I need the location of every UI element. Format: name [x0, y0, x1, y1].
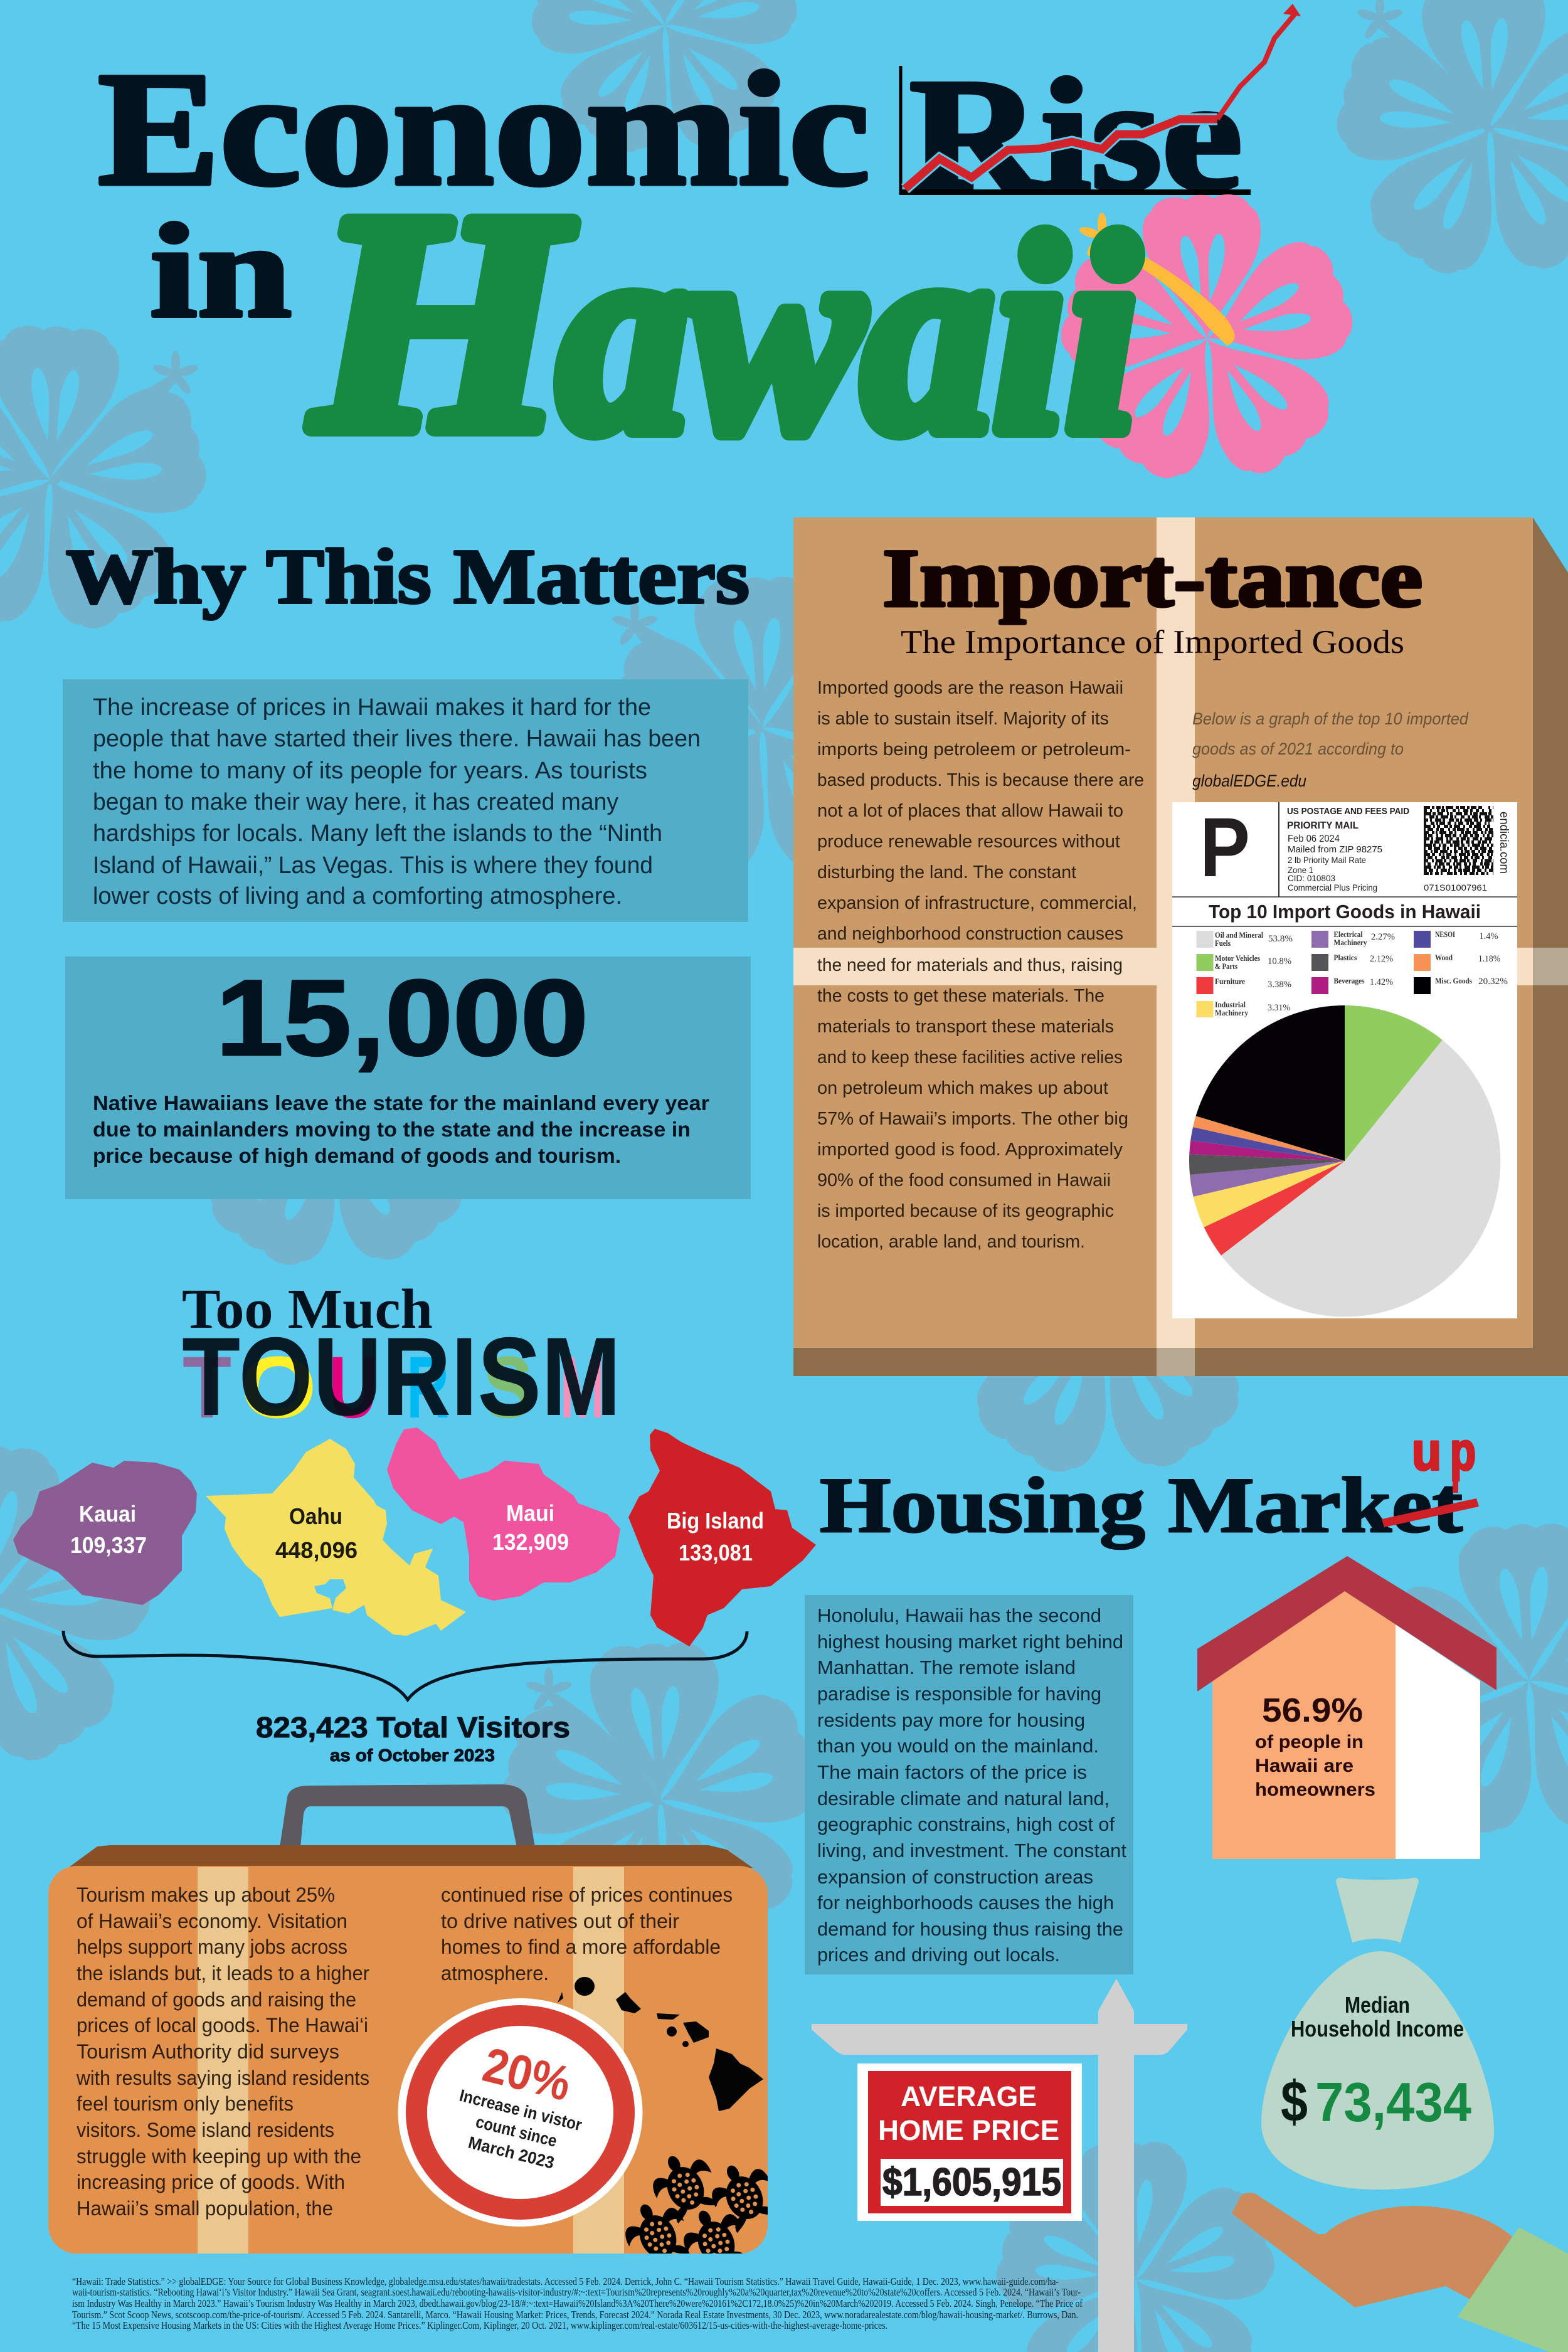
text block: imported goods: materials to transport these materials — [817, 1017, 1114, 1037]
icon: for sale style sign: AVERAGE — [901, 2080, 1037, 2112]
panel: why this matters text — [63, 679, 748, 922]
text: tourism column one — [76, 1883, 369, 2220]
heading: Too Much: Too Much — [182, 1278, 433, 1340]
legend: 20.32% — [1478, 977, 1508, 987]
citations: ism Industry Was Healthy in March 2023.” Hawaii’s Tourism Industry Was Healthy in March 2023, dbedt.hawaii.gov/blog/23-18/#:~:text=Hawaii%20Island%3A%20There%20were%20161%2C172,18.0%25)%20in%20March%202019. Accessed 5 Feb. 2024. Singh, Penelope. “The Price of — [72, 2297, 1083, 2309]
legend: 2.12% — [1370, 954, 1393, 964]
icon: house homeowners: of people in — [1255, 1732, 1364, 1752]
legend: Oil and Mineral — [1215, 931, 1263, 940]
heading: Import-tance: The Importance of Imported Goods — [901, 624, 1404, 660]
heading: TOURISM: R — [406, 1338, 449, 1436]
panel: housing text: The main factors of the price is — [817, 1761, 1087, 1783]
icon: for sale style sign: $1,605,915 — [882, 2161, 1061, 2204]
panel: housing text: for neighborhoods causes the high — [817, 1892, 1114, 1914]
panel: shipping label chart — [1172, 801, 1517, 1318]
text block: imported goods: not a lot of places that allow Hawaii to — [817, 801, 1123, 821]
island: Big Island: Big Island — [667, 1508, 764, 1534]
legend: Misc. Goods — [1435, 977, 1472, 985]
text block: imported goods: produce renewable resources without — [817, 832, 1120, 852]
text block: imported goods: the costs to get these materials. The — [817, 986, 1104, 1006]
panel: why this matters text: the home to many of its people for years. As tourists — [93, 758, 647, 784]
stamp: 20 percent increase: Increase in vistor — [458, 2086, 584, 2134]
legend: Fuels — [1215, 939, 1231, 948]
panel: 15,000 stat: 15,000 — [216, 958, 588, 1078]
panel: housing text — [805, 1595, 1133, 1974]
panel: housing text: Manhattan. The remote island — [817, 1656, 1076, 1678]
text: tourism column one: Hawaii’s small population, the — [77, 2197, 333, 2220]
icon: for sale style sign — [812, 1979, 1187, 2352]
text: tourism column one: demand of goods and raising the — [77, 1988, 356, 2011]
heading: TOURISM: S — [483, 1338, 533, 1436]
text block: imported goods: and neighborhood construction causes — [817, 924, 1123, 944]
label: postage header: Zone 1 — [1288, 865, 1313, 875]
panel: 15,000 stat: price because of high demand of goods and tourism. — [93, 1144, 621, 1167]
stamp: 20 percent increase: March 2023 — [467, 2133, 556, 2173]
icon: house homeowners: Hawaii are — [1255, 1756, 1353, 1776]
title: Economic Rise: Economic — [98, 39, 870, 220]
heading: TOURISM: U — [329, 1338, 378, 1436]
text: tourism column one: Tourism Authority did surveys — [77, 2040, 339, 2063]
legend: Beverages — [1333, 977, 1365, 985]
text: tourism column two: to drive natives out of their — [441, 1910, 679, 1932]
panel: 15,000 stat: Native Hawaiians leave the state for the mainland every year — [93, 1091, 709, 1115]
heading: Housing Market — [820, 1422, 1479, 1549]
text block: imported goods: imported good is food. Approximately — [817, 1140, 1123, 1160]
panel: why this matters text: began to make their way here, it has created many — [93, 789, 618, 815]
legend: Furniture — [1215, 977, 1245, 986]
title: in: in — [150, 196, 292, 346]
panel: housing text: demand for housing thus raising the — [817, 1918, 1123, 1940]
panel: housing text: geographic constrains, high cost of — [817, 1813, 1115, 1835]
icon: money bag median income: Household Income — [1291, 2016, 1464, 2042]
panel: why this matters text: people that have started their lives there. Hawaii has been — [93, 726, 701, 752]
label: postage header: endicia.com — [1497, 812, 1510, 874]
heading: Housing Market: u — [1412, 1422, 1441, 1481]
text block: imported goods: is imported because of its geographic — [817, 1201, 1114, 1221]
text block: imported goods: and to keep these facilities active relies — [817, 1047, 1123, 1067]
legend: NESOI — [1435, 930, 1455, 939]
panel: housing text: than you would on the mainland. — [817, 1735, 1099, 1757]
text block: imported goods: 90% of the food consumed in Hawaii — [817, 1170, 1111, 1190]
legend: Plastics — [1333, 953, 1357, 962]
island: Maui — [387, 1428, 620, 1601]
note: graph introduction: Below is a graph of the top 10 imported — [1192, 709, 1469, 728]
panel: why this matters text: Island of Hawaii,” Las Vegas. This is where they found — [93, 852, 653, 879]
icon: sea turtles — [625, 2156, 768, 2254]
total visitors: 823,423 Total Visitors — [256, 1711, 570, 1744]
label: postage header: CID: 010803 — [1288, 873, 1335, 883]
chart title: Top 10 Import Goods in Hawaii — [1209, 901, 1481, 923]
text block: imported goods: imports being petroleem or petroleum- — [817, 739, 1131, 760]
panel: housing text: highest housing market right behind — [817, 1631, 1123, 1653]
panel: suitcase — [48, 1784, 784, 2282]
label: postage header: 2 lb Priority Mail Rate — [1288, 855, 1366, 865]
island: Kauai — [13, 1461, 197, 1605]
legend: 3.31% — [1268, 1003, 1290, 1013]
citations: waii-tourism-statistics. “Rebooting Hawai‘i’s Visitor Industry.” Hawaii Sea Grant, seagrant.soest.hawaii.edu/rebooting-hawaiis-visitor-industry/#:~:text=Tourism%20represents%20roughly%20a%20quarter,tax%20revenue%20to%20state%20coffers. Accessed 5 Feb. 2024. “Hawaii’s Tour- — [72, 2286, 1081, 2298]
icon: money bag median income — [1261, 1878, 1494, 2190]
legend: 2.27% — [1371, 932, 1395, 942]
suitcase handle — [280, 1784, 535, 1847]
icon: house homeowners: homeowners — [1255, 1779, 1375, 1800]
text: tourism column one: with results saying island residents — [76, 2067, 369, 2089]
legend: Electrical — [1333, 930, 1363, 939]
text block: imported goods: Imported goods are the reason Hawaii — [817, 678, 1123, 698]
panel: housing text: desirable climate and natural land, — [817, 1788, 1110, 1809]
stamp: 20 percent increase — [398, 1998, 642, 2227]
text block: imported goods: expansion of infrastructure, commercial, — [817, 893, 1137, 913]
text: tourism column one: the islands but, it leads to a higher — [77, 1962, 369, 1984]
legend — [1197, 930, 1508, 1017]
citations: “Hawaii: Trade Statistics.” >> globalEDGE: Your Source for Global Business Knowledge, globaledge.msu.edu/states/hawaii/tradestats. Accessed 5 Feb. 2024. Derrick, John C. “Hawaii Tourism Statistics.” Hawaii Travel Guide, Hawaii-Guide, 1 Dec. 2023, www.hawaii-guide.com/ha- — [72, 2275, 1059, 2287]
text: tourism column two — [441, 1883, 733, 1984]
island: Oahu: Oahu — [289, 1503, 342, 1529]
island: Oahu — [206, 1439, 466, 1636]
heading: Housing Market: p — [1450, 1422, 1476, 1481]
panel: housing text: Honolulu, Hawaii has the second — [817, 1604, 1101, 1626]
stamp: 20 percent increase: count since — [474, 2112, 559, 2151]
legend: Wood — [1435, 953, 1453, 962]
panel: 15,000 stat: due to mainlanders moving to the state and the increase in — [93, 1118, 691, 1141]
pie chart — [1189, 1005, 1500, 1316]
icon: house homeowners: 56.9% — [1262, 1692, 1363, 1729]
text: tourism column one: helps support many jobs across — [77, 1936, 347, 1958]
label: postage header: PRIORITY MAIL — [1287, 820, 1359, 831]
brace — [63, 1631, 747, 1700]
icon: hand holding bag — [1232, 2193, 1568, 2352]
text: tourism column two: atmosphere. — [441, 1962, 549, 1984]
note: graph introduction — [1192, 709, 1469, 790]
text block: imported goods: is able to sustain itself. Majority of its — [817, 709, 1109, 729]
heading: TOURISM: M — [560, 1338, 605, 1436]
heading: TOURISM: O — [240, 1338, 317, 1436]
citations: “The 15 Most Expensive Housing Markets in the US: Cities with the Highest Average Home Prices.” Kiplinger.Com, Kiplinger, 20 Oct. 2021, www.kiplinger.com/real-estate/603612/15-us-cities-with-the-highest-average-home-prices. — [72, 2319, 887, 2331]
legend: 10.8% — [1268, 956, 1291, 967]
icon: Hawaiian islands map — [558, 1977, 763, 2111]
citations: Tourism.” Scot Scoop News, scotscoop.com/the-price-of-tourism/. Accessed 5 Feb. 2024. Santarelli, Marco. “Hawaii Housing Market: Prices, Trends, Forecast 2024.” Norada Real Estate Investments, 30 Dec. 2023, www.noradarealestate.com/blog/hawaii-housing-market/. Burrows, Dan. — [72, 2309, 1078, 2321]
icon: pink hibiscus — [1045, 187, 1370, 498]
island: Kauai: Kauai — [79, 1501, 136, 1527]
text block: imported goods: disturbing the land. The constant — [817, 862, 1076, 882]
text: tourism column one: of Hawaii’s economy. Visitation — [77, 1910, 347, 1932]
legend: 1.4% — [1479, 931, 1498, 941]
stamp: 20 percent increase: 20% — [478, 2037, 576, 2111]
title: Economic Rise — [98, 39, 1242, 224]
text block: imported goods: on petroleum which makes up about — [817, 1078, 1108, 1098]
text block: imported goods — [817, 678, 1144, 1252]
panel: housing text: paradise is responsible for having — [817, 1683, 1101, 1705]
heading: Import-tance — [882, 532, 1422, 660]
note: graph introduction: goods as of 2021 according to — [1192, 739, 1404, 758]
island: Maui: 132,909 — [492, 1529, 569, 1555]
icon: money bag median income: 73,434 — [1315, 2071, 1471, 2133]
citations — [72, 2275, 1083, 2331]
icon: money bag median income: Median — [1345, 1992, 1410, 2018]
island: Maui: Maui — [506, 1500, 554, 1526]
island: Kauai: 109,337 — [70, 1532, 147, 1558]
panel: why this matters text: lower costs of living and a comforting atmosphere. — [93, 883, 622, 909]
heading: Import-tance: Import-tance — [882, 532, 1422, 624]
panel: housing text: residents pay more for housing — [817, 1709, 1085, 1731]
panel: housing text: living, and investment. The constant — [817, 1840, 1126, 1862]
label: postage header: US POSTAGE AND FEES PAID — [1287, 806, 1409, 817]
text: tourism column one: feel tourism only benefits — [77, 2092, 294, 2115]
rising line chart over Rise — [899, 4, 1301, 195]
legend: Machinery — [1333, 938, 1367, 947]
icon: house homeowners — [1197, 1556, 1496, 1859]
text: tourism column two: continued rise of prices continues — [441, 1883, 733, 1906]
icon: money bag median income: $ — [1281, 2070, 1308, 2134]
label: postage header: Mailed from ZIP 98275 — [1288, 844, 1382, 855]
island: Big Island — [628, 1429, 816, 1646]
island: Big Island: 133,081 — [679, 1540, 753, 1565]
heading: Housing Market: Housing Market — [820, 1462, 1463, 1549]
panel: why this matters text: The increase of prices in Hawaii makes it hard for the — [93, 694, 651, 721]
text block: imported goods: location, arable land, and tourism. — [817, 1232, 1085, 1252]
title: Hawaii: H — [309, 149, 576, 496]
heading: TOURISM: TOURISM — [182, 1314, 621, 1439]
legend: Motor Vehicles — [1215, 954, 1260, 963]
label: postage header: 071S01007961 — [1424, 882, 1487, 893]
panel: housing text: prices and driving out locals. — [817, 1944, 1060, 1966]
note: graph introduction: globalEDGE.edu — [1192, 771, 1306, 790]
heading: Why This Matters: Why This Matters — [66, 534, 750, 620]
text: tourism column two: homes to find a more affordable — [441, 1936, 721, 1958]
label: postage header: P — [1200, 801, 1250, 894]
heading: TOURISM: T — [183, 1338, 231, 1436]
legend: Industrial — [1215, 1000, 1246, 1009]
title: Hawaii — [309, 149, 1139, 496]
label: postage header: Commercial Plus Pricing — [1288, 882, 1377, 893]
icon: barcode — [1424, 808, 1493, 873]
total visitors — [256, 1711, 570, 1765]
legend: 53.8% — [1268, 934, 1293, 944]
legend: 3.38% — [1268, 980, 1291, 990]
label: postage header — [1200, 801, 1510, 894]
text: tourism column one: Tourism makes up about 25% — [77, 1883, 335, 1906]
title: Economic Rise: Rise — [909, 46, 1242, 224]
text: tourism column one: increasing price of goods. With — [77, 2171, 345, 2193]
text: tourism column one: visitors. Some island residents — [77, 2119, 334, 2141]
text block: imported goods: based products. This is because there are — [817, 770, 1144, 790]
legend: 1.18% — [1478, 954, 1500, 964]
text: tourism column one: prices of local goods. The Hawai‘i — [77, 2014, 368, 2037]
text block: imported goods: 57% of Hawaii’s imports. The other big — [817, 1109, 1128, 1129]
text: tourism column one: struggle with keeping up with the — [77, 2145, 361, 2168]
title: Hawaii: awaii — [558, 178, 1139, 490]
total visitors: as of October 2023 — [330, 1745, 495, 1765]
legend: Machinery — [1215, 1009, 1249, 1017]
legend: & Parts — [1215, 962, 1237, 971]
island: Oahu: 448,096 — [275, 1537, 358, 1563]
icon: for sale style sign: HOME PRICE — [878, 2114, 1059, 2146]
panel: housing text: expansion of construction areas — [817, 1866, 1093, 1888]
label: postage header: Feb 06 2024 — [1288, 834, 1340, 844]
panel: cardboard box — [793, 517, 1568, 1376]
legend: 1.42% — [1370, 977, 1393, 987]
panel: why this matters text: hardships for locals. Many left the islands to the “Ninth — [93, 820, 662, 847]
text block: imported goods: the need for materials and thus, raising — [817, 955, 1123, 975]
panel: 15,000 stat — [65, 956, 751, 1199]
